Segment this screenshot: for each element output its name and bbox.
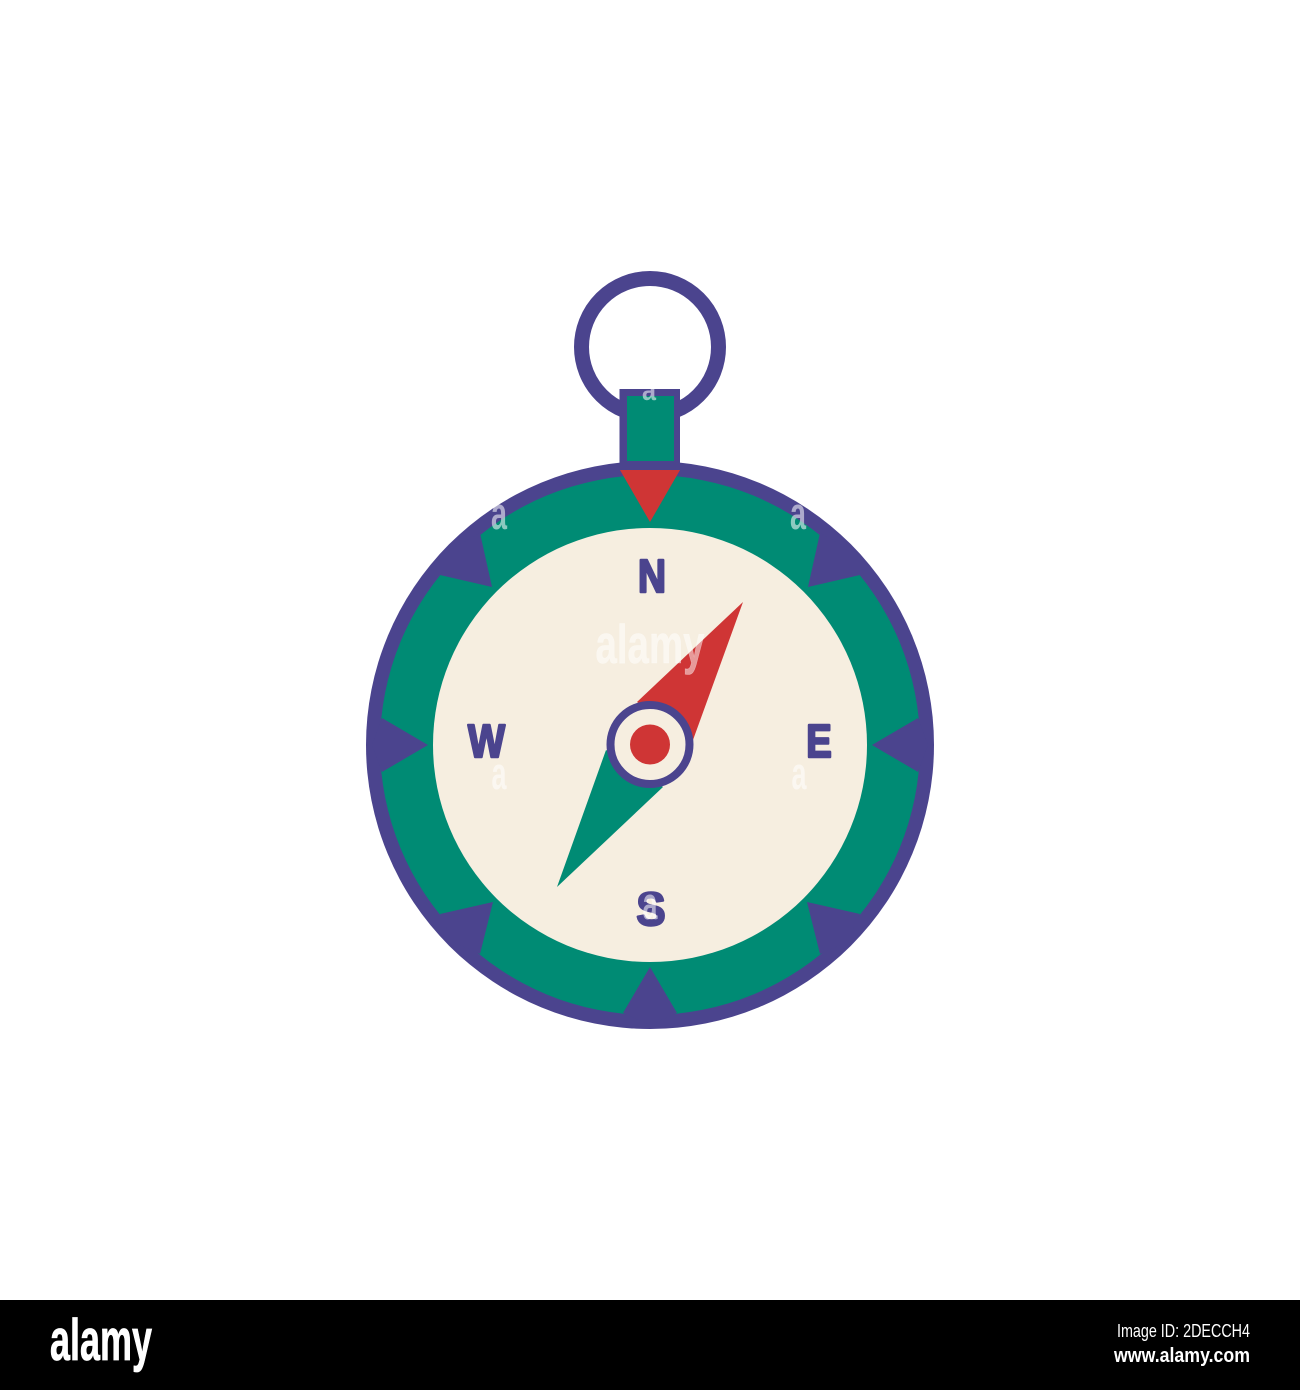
- compass needle: [557, 602, 743, 887]
- compass outer rim: [366, 461, 934, 1029]
- watermark: alamy: alamy: [596, 613, 705, 675]
- website url: www.alamy.com: [1113, 1345, 1250, 1367]
- bezel direction markers: [372, 533, 928, 1025]
- image id: Image ID: 2DECCH4: [1117, 1321, 1250, 1341]
- footer bar: [0, 1300, 1300, 1390]
- cardinal letter E: E: [806, 715, 832, 767]
- hanging ring: [582, 278, 718, 416]
- watermark letters: a: [642, 878, 658, 929]
- cardinal letter N: N: [638, 550, 666, 602]
- cardinal letter S: S: [636, 883, 666, 935]
- watermark letters: a: [790, 488, 807, 539]
- watermark letters: a: [492, 748, 507, 799]
- watermark letters: [491, 374, 807, 929]
- cream dial face: [433, 528, 867, 962]
- green bezel: [380, 475, 920, 1015]
- icon: compass: [366, 278, 934, 1029]
- footer logo: alamy: alamy: [50, 1308, 152, 1373]
- watermark letters: a: [642, 374, 656, 407]
- watermark letters: a: [491, 488, 508, 539]
- loop tab: [620, 389, 680, 471]
- watermark letters: a: [792, 748, 807, 799]
- cardinal letter W: W: [468, 715, 505, 767]
- red north marker: [620, 470, 680, 522]
